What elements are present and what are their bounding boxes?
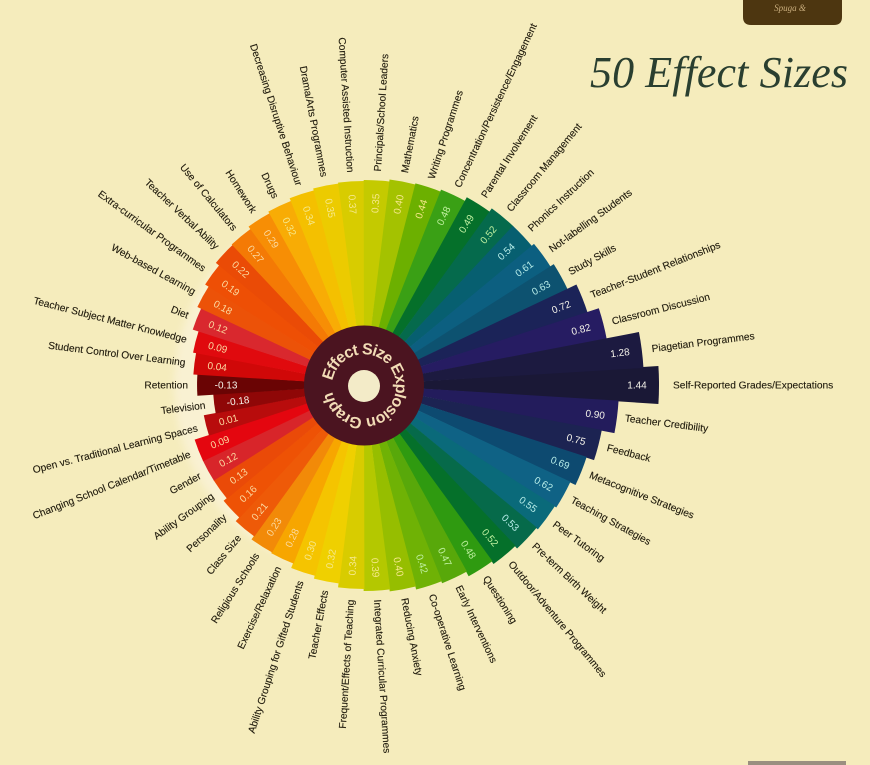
segment: Open vs. Traditional Learning Spaces 0.01: 0.01 — [218, 413, 240, 429]
segment: Parental Involvement 0.49: 0.49 — [457, 213, 477, 235]
segment: Teacher Subject Matter Knowledge 0.09: Teacher Subject Matter Knowledge — [32, 296, 188, 346]
segment: Frequent/Effects of Teaching 0.34 — [329, 384, 377, 729]
segment: Teacher Credibility 0.90: Teacher Credibility — [624, 413, 710, 435]
segment: Drugs 0.32: 0.32 — [279, 216, 298, 239]
segment: Open vs. Traditional Learning Spaces 0.01 — [30, 375, 367, 480]
segment: Extra-curricular Programmes 0.19: Extra-curricular Programmes — [95, 189, 207, 274]
segment: Principals/School Leaders 0.35 — [351, 53, 398, 386]
segment: Phonics Instruction 0.54: Phonics Instruction — [526, 167, 597, 234]
segment: Integrated Curricular Programmes 0.39 — [351, 384, 400, 754]
segment: Ability Grouping for Gifted Students 0.30: 0.30 — [303, 539, 320, 562]
segment: Changing School Calendar/Timetable 0.09 — [29, 374, 368, 527]
segment: Classroom Management 0.52: Classroom Management — [505, 122, 585, 214]
segment: Early Interventions 0.47: Early Interventions — [453, 584, 499, 665]
segment: Piagetian Programmes 1.28 — [362, 318, 757, 403]
segment: Writing Programmes 0.44: Writing Programmes — [427, 89, 466, 181]
segment: Early Interventions 0.47: 0.47 — [435, 546, 453, 569]
segment: Metacognitive Strategies 0.69: Metacognitive Strategies — [588, 470, 695, 522]
segment: Use of Calculators 0.27 — [173, 157, 374, 393]
segment: Mathematics 0.40: Mathematics — [400, 115, 422, 174]
segment: Self-Reported Grades/Expectations 1.44: 1.44 — [627, 380, 647, 392]
hub title: Effect Size Explosion Graph — [322, 343, 406, 428]
title: 50 Effect Sizes — [590, 48, 848, 97]
segment: Metacognitive Strategies 0.69 — [358, 371, 699, 530]
segment: Feedback 0.75: Feedback — [605, 443, 652, 465]
segment: Class Size 0.21: Class Size — [205, 533, 244, 577]
segment: Classroom Management 0.52: 0.52 — [479, 224, 500, 246]
segment: Computer Assisted Instruction 0.37 — [329, 37, 377, 386]
segment: Use of Calculators 0.27: Use of Calculators — [177, 162, 239, 233]
segment: Integrated Curricular Programmes 0.39: Integrated Curricular Programmes — [371, 599, 392, 754]
segment: Reducing Anxiety 0.40 — [351, 382, 433, 679]
segment: Teacher Subject Matter Knowledge 0.09: 0.09 — [207, 341, 229, 356]
segment: Pre-term Birth Weight 0.53: 0.53 — [499, 513, 521, 534]
segment: Teacher Verbal Ability 0.22 — [138, 172, 372, 394]
segment: Feedback 0.75 — [360, 370, 655, 474]
segment: Classroom Discussion 0.82 — [360, 281, 714, 400]
bottom grey bar — [748, 761, 846, 765]
segment: Personality 0.16: Personality — [185, 512, 230, 555]
segment: Questioning 0.48: Questioning — [480, 574, 519, 626]
segment: Television -0.18 — [160, 375, 365, 420]
segment: Not-labelling Students 0.61: Not-labelling Students — [547, 188, 635, 255]
segment: Religious Schools 0.23 — [203, 378, 374, 629]
segment: Television -0.18: Television — [160, 401, 206, 417]
segment: Classroom Management 0.52 — [353, 115, 590, 394]
segment: Teaching Strategies 0.62: 0.62 — [532, 475, 555, 494]
segment: Study Skills 0.63: Study Skills — [567, 243, 618, 278]
segment: Mathematics 0.40: 0.40 — [392, 193, 407, 215]
segment: Co-operative Learning 0.42 — [351, 381, 476, 695]
segment: Questioning 0.48 — [352, 377, 527, 630]
segment: Frequent/Effects of Teaching 0.34: 0.34 — [348, 555, 360, 576]
brand tag: Spuga & — [774, 3, 806, 13]
segment: Web-based Learning 0.18: 0.18 — [211, 299, 234, 318]
segment: Teacher Verbal Ability 0.22: Teacher Verbal Ability — [142, 177, 221, 253]
segment: Pre-term Birth Weight 0.53 — [354, 375, 615, 622]
segment: Piagetian Programmes 1.28: Piagetian Programmes — [651, 331, 755, 355]
segment: Use of Calculators 0.27: 0.27 — [244, 244, 266, 266]
segment: Drugs 0.32: Drugs — [258, 171, 280, 200]
segment: Student Control Over Learning 0.04: Student Control Over Learning — [48, 341, 186, 369]
segment: Teacher Credibility 0.90: 0.90 — [585, 409, 606, 422]
segment: Diet 0.12: Diet — [169, 305, 190, 322]
brand tag — [743, 0, 842, 25]
segment: Peer Tutoring 0.55: 0.55 — [517, 495, 539, 516]
segment: Changing School Calendar/Timetable 0.09: 0.09 — [209, 434, 232, 452]
segment: Extra-curricular Programmes 0.19: 0.19 — [219, 279, 241, 299]
segment: Exercise/Relaxation 0.28: Exercise/Relaxation — [236, 565, 284, 651]
segment: Drugs 0.32 — [253, 168, 376, 390]
segment: Gender 0.12: Gender — [168, 471, 204, 497]
segment: Co-operative Learning 0.42: Co-operative Learning — [426, 593, 468, 692]
segment: Decreasing Disruptive Behaviour 0.34: 0.34 — [300, 205, 316, 227]
segment: Diet 0.12: 0.12 — [207, 319, 229, 337]
segment: Teacher Effects 0.32: Teacher Effects — [307, 589, 331, 660]
segment: Teacher Verbal Ability 0.22: 0.22 — [229, 259, 251, 281]
segment: Writing Programmes 0.44 — [351, 86, 472, 389]
segment: Extra-curricular Programmes 0.19 — [92, 183, 371, 395]
segment: Exercise/Relaxation 0.28 — [229, 380, 375, 654]
segment: Classroom Discussion 0.82: Classroom Discussion — [611, 292, 711, 328]
segment: Homework 0.29: 0.29 — [261, 228, 281, 251]
segment: Pre-term Birth Weight 0.53: Pre-term Birth Weight — [529, 541, 608, 616]
segment: Personality 0.16 — [180, 376, 372, 559]
segment: Frequent/Effects of Teaching 0.34: Frequent/Effects of Teaching — [338, 599, 357, 729]
segment: Ability Grouping for Gifted Students 0.30 — [239, 381, 376, 737]
segment: Changing School Calendar/Timetable 0.09: Changing School Calendar/Timetable — [31, 450, 193, 522]
segment: Not-labelling Students 0.61: 0.61 — [514, 259, 536, 280]
segment: Early Interventions 0.47 — [352, 379, 507, 668]
segment: Parental Involvement 0.49 — [352, 108, 547, 392]
segment: Metacognitive Strategies 0.69: 0.69 — [549, 455, 571, 472]
segment: Phonics Instruction 0.54: 0.54 — [496, 241, 518, 263]
segment: Student Control Over Learning 0.04 — [47, 334, 365, 396]
segment: Outdoor/Adventure Programmes 0.52 — [353, 376, 615, 685]
segment: Ability Grouping 0.13: Ability Grouping — [152, 491, 217, 542]
segment: Diet 0.12 — [167, 298, 368, 396]
segment: Parental Involvement 0.49: Parental Involvement — [480, 113, 540, 200]
segment: Ability Grouping 0.13: 0.13 — [228, 466, 251, 487]
segment: Self-Reported Grades/Expectations 1.44 — [364, 366, 833, 404]
segment: Teaching Strategies 0.62: Teaching Strategies — [569, 495, 652, 548]
segment: Drama/Arts Programmes 0.35: Drama/Arts Programmes — [297, 65, 329, 178]
segment: Outdoor/Adventure Programmes 0.52: 0.52 — [479, 527, 500, 550]
segment: Writing Programmes 0.44: 0.44 — [414, 198, 430, 220]
segment: Not-labelling Students 0.61 — [356, 180, 639, 397]
segment: Peer Tutoring 0.55: Peer Tutoring — [550, 519, 607, 565]
segment: Gender 0.12 — [165, 375, 370, 502]
segment: Piagetian Programmes 1.28: 1.28 — [610, 347, 631, 360]
segment: Decreasing Disruptive Behaviour 0.34: Decreasing Disruptive Behaviour — [247, 43, 304, 188]
segment: Integrated Curricular Programmes 0.39: 0.39 — [368, 558, 381, 578]
segment: Reducing Anxiety 0.40: Reducing Anxiety — [398, 597, 424, 678]
segment: Teacher Subject Matter Knowledge 0.09 — [31, 289, 367, 396]
segment: Teacher Credibility 0.90 — [362, 369, 711, 445]
segment: Computer Assisted Instruction 0.37: 0.37 — [346, 194, 358, 215]
segment: Reducing Anxiety 0.40: 0.40 — [390, 556, 405, 578]
segment: Teacher-Student Relationships 0.72 — [358, 230, 725, 399]
segment: Ability Grouping 0.13 — [148, 376, 371, 546]
segment: Retention -0.13 — [144, 374, 364, 396]
segment: Web-based Learning 0.18 — [106, 236, 370, 395]
segment: Teacher-Student Relationships 0.72: 0.72 — [550, 299, 573, 317]
segment: Television -0.18: -0.18 — [226, 395, 251, 409]
hub — [304, 326, 424, 446]
segment: Study Skills 0.63: 0.63 — [530, 279, 553, 298]
segment: Mathematics 0.40 — [351, 114, 428, 388]
segment: Teacher Effects 0.32: 0.32 — [325, 548, 339, 570]
segment: Retention -0.13: Retention — [144, 380, 188, 392]
segment: Principals/School Leaders 0.35: Principals/School Leaders — [373, 54, 391, 172]
segment: Concentration/Persistence/Engagement 0.48: Concentration/Persistence/Engagement — [453, 22, 540, 190]
segment: Gender 0.12: 0.12 — [217, 451, 240, 470]
segment: Phonics Instruction 0.54 — [354, 160, 602, 395]
segment: Peer Tutoring 0.55 — [355, 373, 612, 571]
segment: Computer Assisted Instruction 0.37: Computer Assisted Instruction — [336, 37, 355, 173]
segment: Teacher-Student Relationships 0.72: Teacher-Student Relationships — [589, 240, 722, 301]
segment: Study Skills 0.63 — [357, 234, 622, 398]
segment: Concentration/Persistence/Engagement 0.48 — [352, 18, 546, 391]
segment: Class Size 0.21: 0.21 — [250, 501, 271, 523]
segment: Classroom Discussion 0.82: 0.82 — [570, 322, 592, 338]
segment: Homework 0.29 — [217, 164, 375, 392]
segment: Personality 0.16: 0.16 — [238, 484, 260, 505]
segment: Teacher Effects 0.32 — [299, 383, 377, 662]
segment: Student Control Over Learning 0.04: 0.04 — [207, 361, 228, 374]
segment: Self-Reported Grades/Expectations 1.44: Self-Reported Grades/Expectations — [673, 380, 833, 392]
segment: Co-operative Learning 0.42: 0.42 — [413, 553, 430, 575]
segment: Exercise/Relaxation 0.28: 0.28 — [284, 527, 302, 549]
segment: Teaching Strategies 0.62 — [357, 372, 657, 555]
segment: Outdoor/Adventure Programmes 0.52: Outdoor/Adventure Programmes — [506, 559, 608, 680]
segment: Principals/School Leaders 0.35: 0.35 — [370, 193, 383, 213]
segment: Religious Schools 0.23: Religious Schools — [210, 551, 262, 626]
segment: Class Size 0.21 — [199, 377, 373, 581]
segment: Homework 0.29: Homework — [223, 168, 258, 216]
segment: Questioning 0.48: 0.48 — [458, 539, 478, 562]
segment: Web-based Learning 0.18: Web-based Learning — [109, 243, 197, 298]
segment: Drama/Arts Programmes 0.35 — [290, 64, 377, 387]
segment: Religious Schools 0.23: 0.23 — [265, 516, 285, 539]
segment: Open vs. Traditional Learning Spaces 0.01: Open vs. Traditional Learning Spaces — [32, 423, 199, 476]
segment: Decreasing Disruptive Behaviour 0.34 — [241, 40, 376, 389]
segment: Ability Grouping for Gifted Students 0.30: Ability Grouping for Gifted Students — [247, 580, 307, 735]
segment: Feedback 0.75: 0.75 — [565, 433, 587, 448]
segment: Concentration/Persistence/Engagement 0.48: 0.48 — [435, 205, 454, 227]
segment: Drama/Arts Programmes 0.35: 0.35 — [322, 198, 337, 219]
segment: Retention -0.13: -0.13 — [215, 380, 238, 392]
